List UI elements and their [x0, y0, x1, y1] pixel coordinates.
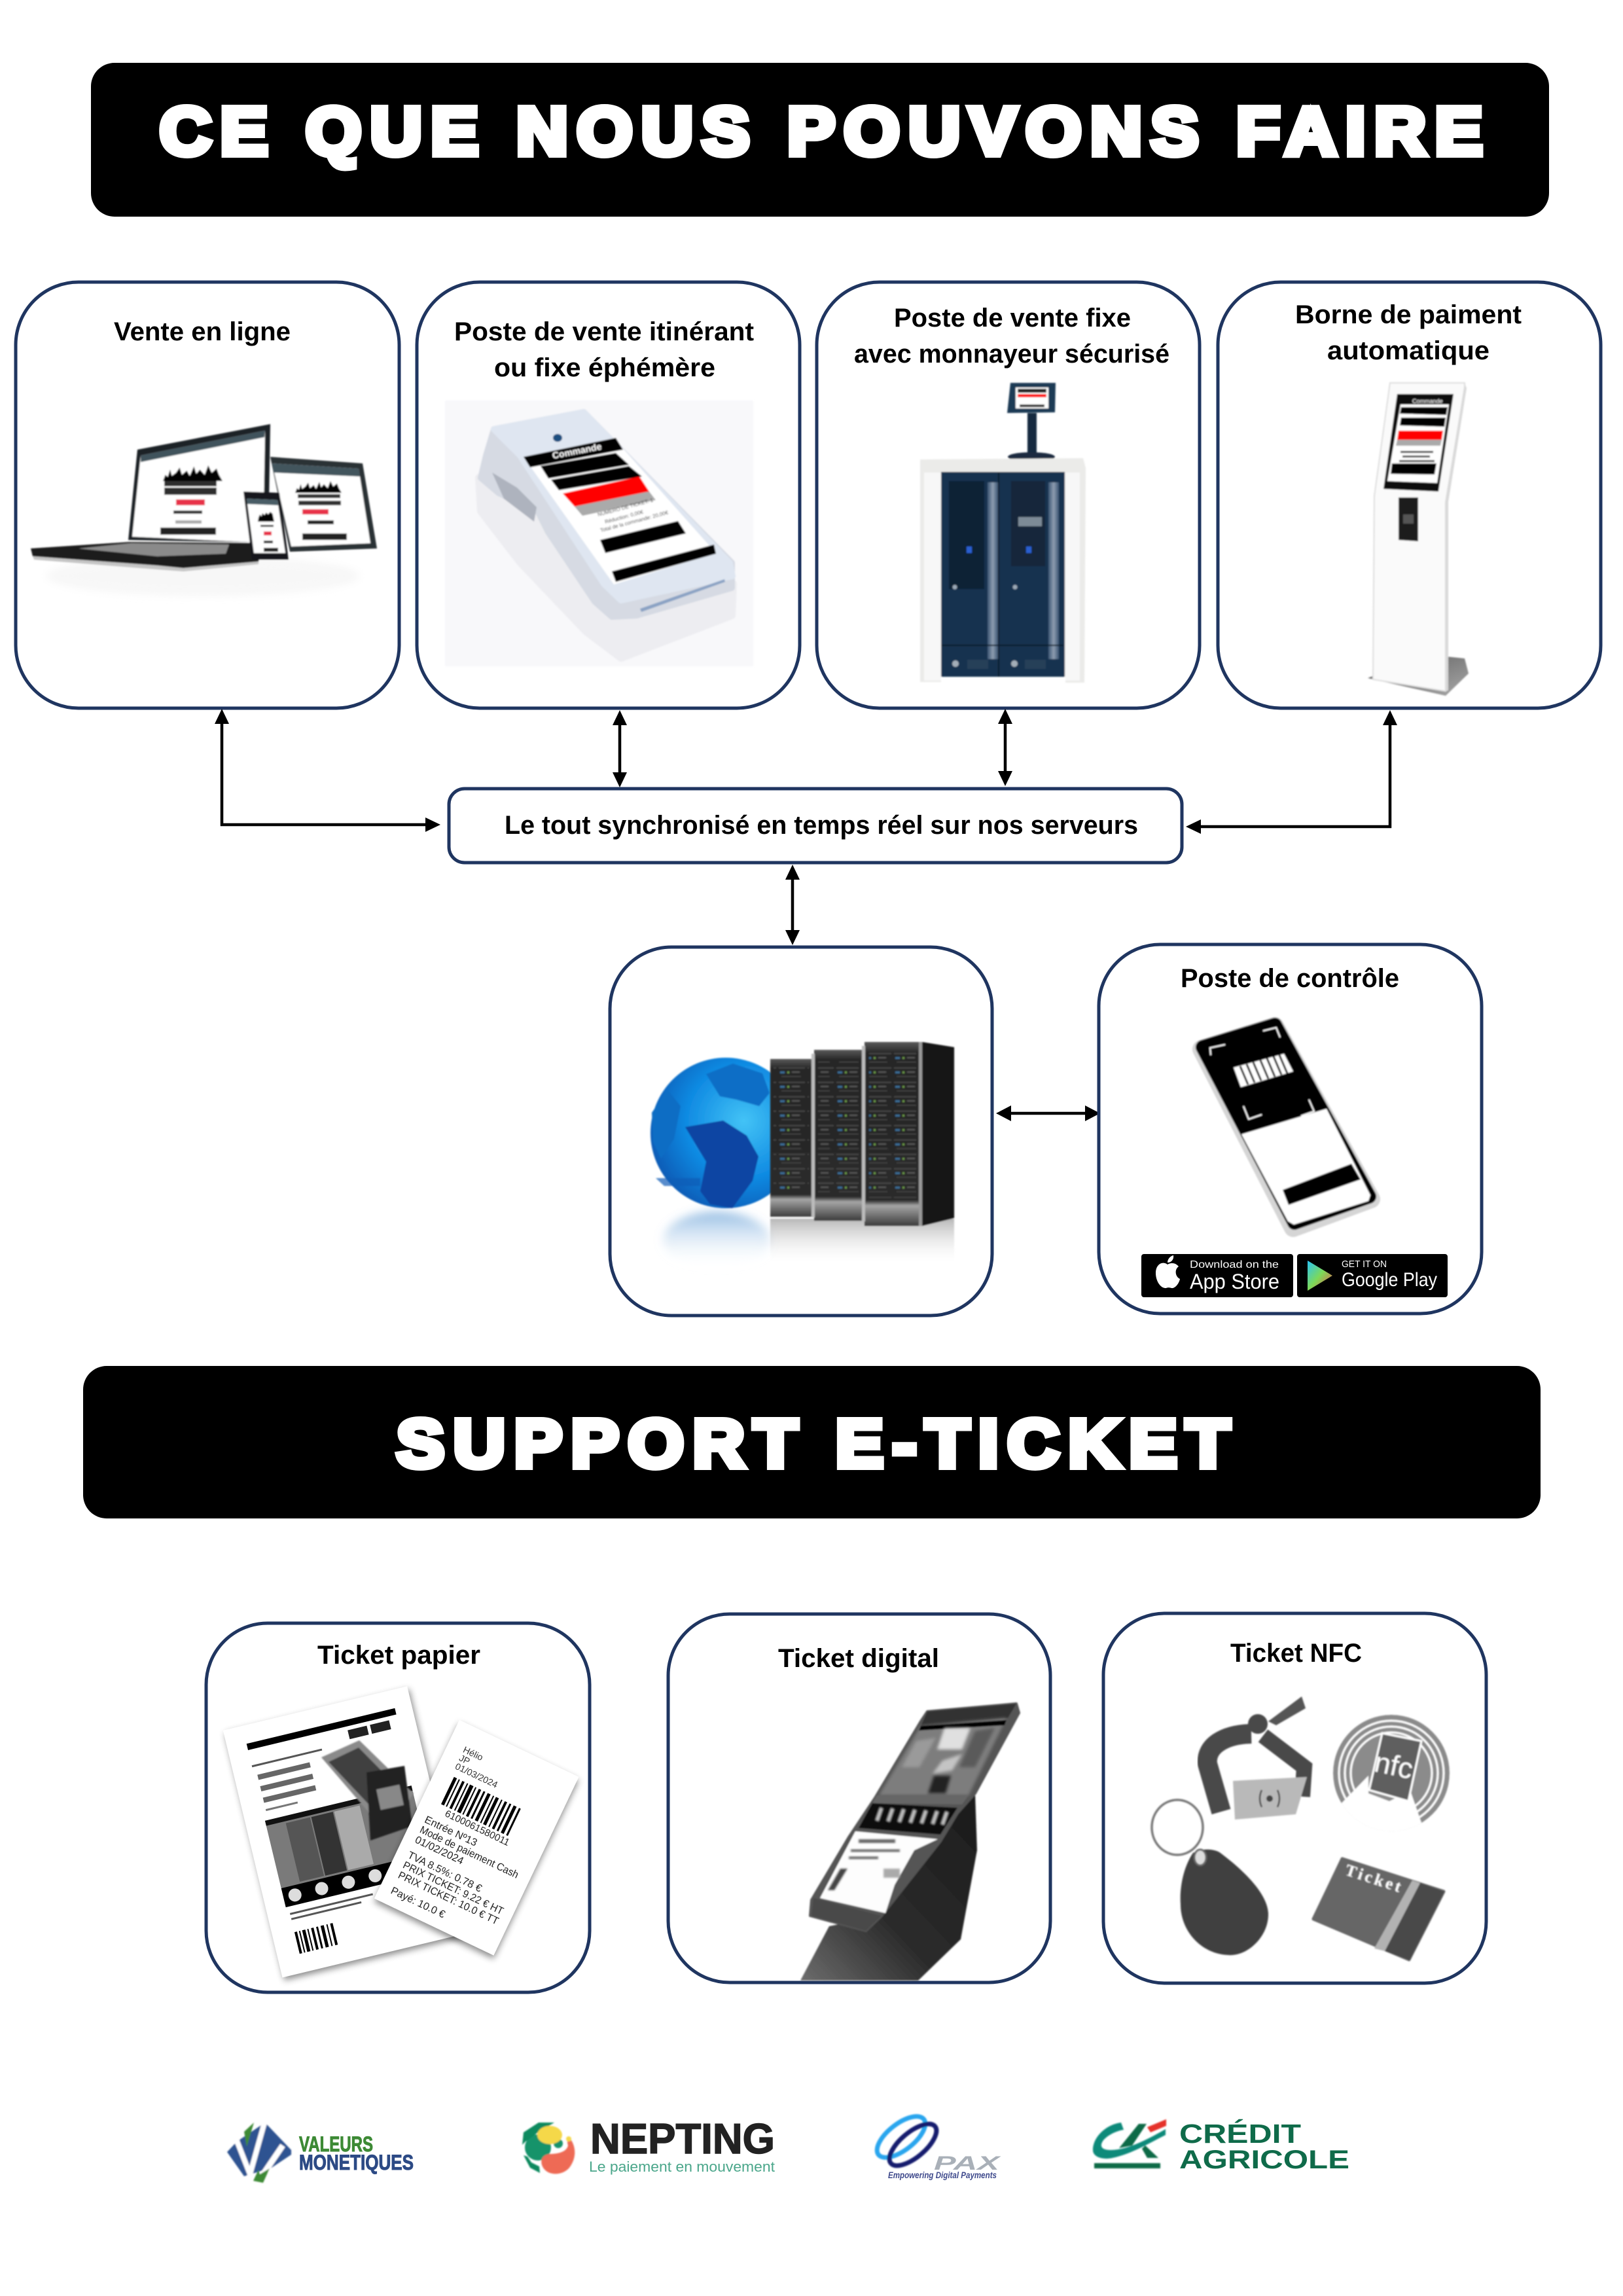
icon: ca emblem: [1093, 2119, 1166, 2168]
image: receipt: TVA 8.5%: 0.78 €: [406, 1850, 484, 1895]
image: receipt: Mode de paiement Cash: [418, 1824, 520, 1881]
icon: nepting coins: [522, 2123, 575, 2174]
icon: nfc sticker: [1332, 1713, 1450, 1823]
image: payment kiosk: [1368, 383, 1469, 696]
image: receipt: PRIX TICKET: 10.0 € TT: [396, 1870, 501, 1928]
image: server racks: [770, 1042, 954, 1266]
panel: poste de vente fixe: [817, 282, 1200, 708]
title banner: ce que nous pouvons faire: [91, 63, 1549, 217]
logo: pax: PAX: [934, 2153, 1001, 2174]
image: payment terminal: [445, 401, 753, 666]
image: hand holding phone: [800, 1704, 1019, 1981]
image: receipt: PRIX TICKET: 9.22 € HT: [401, 1860, 505, 1917]
badge: app store: [1141, 1254, 1293, 1297]
icon: nfc sticker: nfc: [1372, 1746, 1416, 1785]
logo: pax: Empowering Digital Payments: [888, 2170, 997, 2180]
image: payment terminal: Total de la commande: 20,00€: [599, 509, 669, 533]
heading: ticket nfc: Ticket NFC: [1230, 1639, 1362, 1668]
logo: nepting: Le paiement en mouvement: [589, 2159, 775, 2175]
panel: borne de paiment: [1218, 282, 1601, 708]
image: receipt: Entrée Nº13: [423, 1814, 479, 1849]
badge: app store: Download on the: [1190, 1259, 1279, 1270]
heading line two: ou fixe éphémère: [494, 353, 715, 382]
logo: nepting: NEPTING: [590, 2115, 775, 2162]
logo: valeurs monetiques: [227, 2121, 414, 2183]
logo: credit agricole: AGRICOLE: [1179, 2145, 1349, 2174]
panel: serveurs: [610, 947, 992, 1316]
panel: ticket nfc: [1103, 1613, 1486, 1983]
logo: credit agricole: CRÉDIT: [1179, 2119, 1301, 2149]
badge: google play: [1297, 1254, 1448, 1297]
logo: pax: [870, 2109, 1001, 2180]
heading line two: automatique: [1327, 336, 1489, 365]
panel: ticket digital: [668, 1614, 1050, 1982]
heading: ticket digital: Ticket digital: [778, 1644, 939, 1673]
title banner: ce que nous pouvons faire: CE QUE NOUS POUVONS FAIRE: [160, 94, 1482, 169]
badge: app store: App Store: [1190, 1270, 1279, 1293]
section banner: support e-ticket: [83, 1366, 1541, 1518]
badge: google play: Google Play: [1342, 1269, 1437, 1291]
icon: pax rings: [870, 2109, 943, 2173]
icon: play triangle: [1308, 1261, 1332, 1291]
image: payment terminal: Réduction: 0,00€: [604, 509, 644, 525]
logo: valeurs monetiques: VALEURS: [299, 2132, 373, 2156]
heading: borne de paiment: Borne de paiment: [1295, 300, 1522, 329]
heading: ticket papier: Ticket papier: [317, 1641, 480, 1670]
image: receipt: 01/03/2024: [454, 1761, 499, 1790]
image: receipt: Hélio: [461, 1744, 485, 1763]
image: laptop, tablet and phone: [31, 424, 377, 596]
arrow: poste fixe to serveurs: [998, 709, 1012, 786]
synchronisation box: [449, 789, 1182, 863]
heading line two: avec monnayeur sécurisé: [854, 340, 1169, 368]
arrow: synchronisation to serveurs: [785, 865, 800, 945]
panel: vente en ligne: [16, 282, 399, 708]
image: printed ticket: [223, 1687, 467, 1977]
icon: key fob: [1152, 1800, 1268, 1955]
image: cash machine: [920, 383, 1086, 683]
arrow: vente en ligne to serveurs: [215, 709, 440, 832]
image: payment kiosk: Commande: [1412, 398, 1443, 404]
image: payment terminal: NUMERO DE TICKET: 1: [597, 497, 654, 518]
icon: nfc card: Ticket: [1343, 1861, 1404, 1896]
image: receipt: 6100061580011: [443, 1808, 511, 1848]
logo: nepting: [522, 2115, 775, 2175]
image: receipt: 01/02/2024: [413, 1835, 465, 1867]
image: phone scanning barcode: [1202, 1025, 1371, 1228]
panel: ticket papier: [206, 1623, 590, 1992]
image: globe: [649, 1056, 772, 1254]
heading: poste de vente itinerant: Poste de vente itinérant: [454, 317, 754, 346]
icon: vm diamond: [227, 2121, 291, 2183]
badge: google play: GET IT ON: [1342, 1259, 1387, 1270]
arrow: borne to serveurs: [1186, 710, 1397, 834]
image: receipt: Payé: 10.0 €: [389, 1885, 447, 1920]
heading: poste de controle: Poste de contrôle: [1181, 964, 1399, 993]
icon: nfc wristband: [1207, 1696, 1307, 1820]
panel: poste de controle: [1099, 944, 1482, 1314]
logo: credit agricole: [1093, 2119, 1349, 2174]
arrow: poste itinerant to serveurs: [613, 710, 627, 787]
synchronisation box: Le tout synchronisé en temps réel sur nos serveurs: [505, 811, 1138, 840]
image: receipt: JP: [457, 1753, 472, 1767]
section banner: support e-ticket: SUPPORT E-TICKET: [397, 1407, 1230, 1481]
arrow: serveurs to poste de controle: [996, 1105, 1100, 1121]
image: receipt: [374, 1720, 579, 1956]
image: phones on printed ticket: [321, 1740, 414, 1840]
logo: valeurs monetiques: MONETIQUES: [299, 2151, 414, 2174]
heading: poste de vente fixe: Poste de vente fixe: [894, 304, 1131, 332]
icon: nfc card: [1313, 1859, 1444, 1960]
icon: apple: [1156, 1255, 1180, 1288]
heading: vente en ligne: Vente en ligne: [114, 317, 291, 346]
image: payment terminal: Commande: [552, 441, 603, 461]
panel: poste de vente itinerant: [417, 282, 800, 708]
